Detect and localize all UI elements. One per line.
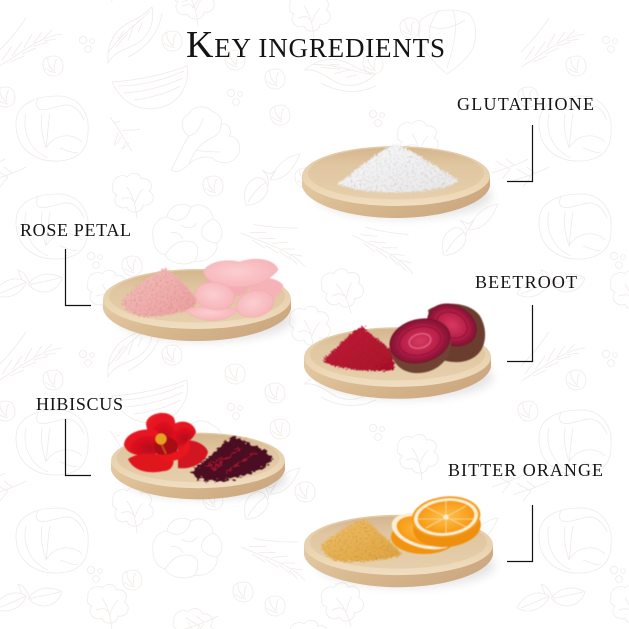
label: glutathione: GLUTATHIONE: [457, 94, 594, 114]
plate: bitter orange powder and slices: [304, 493, 495, 587]
label: beetroot: BEETROOT: [475, 272, 577, 292]
powder pile: white: [337, 144, 459, 192]
label: bitter orange: BITTER ORANGE: [448, 460, 603, 480]
plate: beetroot powder and slices: [304, 295, 493, 399]
beet slices: [385, 295, 485, 373]
powder pile: deep red: [324, 326, 394, 371]
label: rose petal: ROSE PETAL: [20, 220, 131, 240]
plate: rose powder and petals: [103, 259, 293, 341]
connector: glutathione: [507, 125, 532, 182]
powder pile: pink: [122, 268, 197, 316]
connector: beetroot: [507, 305, 532, 362]
label: hibiscus: HIBISCUS: [36, 394, 123, 414]
hibiscus flower: [124, 413, 208, 472]
title: KEY INGREDIENTS: [186, 24, 445, 66]
connector: hibiscus: [66, 419, 91, 476]
connector: rose petal: [66, 249, 91, 306]
orange slices: [388, 493, 483, 555]
plate: hibiscus flower and dried petals: [111, 413, 287, 499]
rose petals: [186, 259, 283, 321]
powder pile: golden: [322, 519, 402, 562]
dried hibiscus: [190, 436, 273, 481]
connector: bitter orange: [507, 505, 532, 562]
plate: glutathione powder: [302, 144, 492, 218]
